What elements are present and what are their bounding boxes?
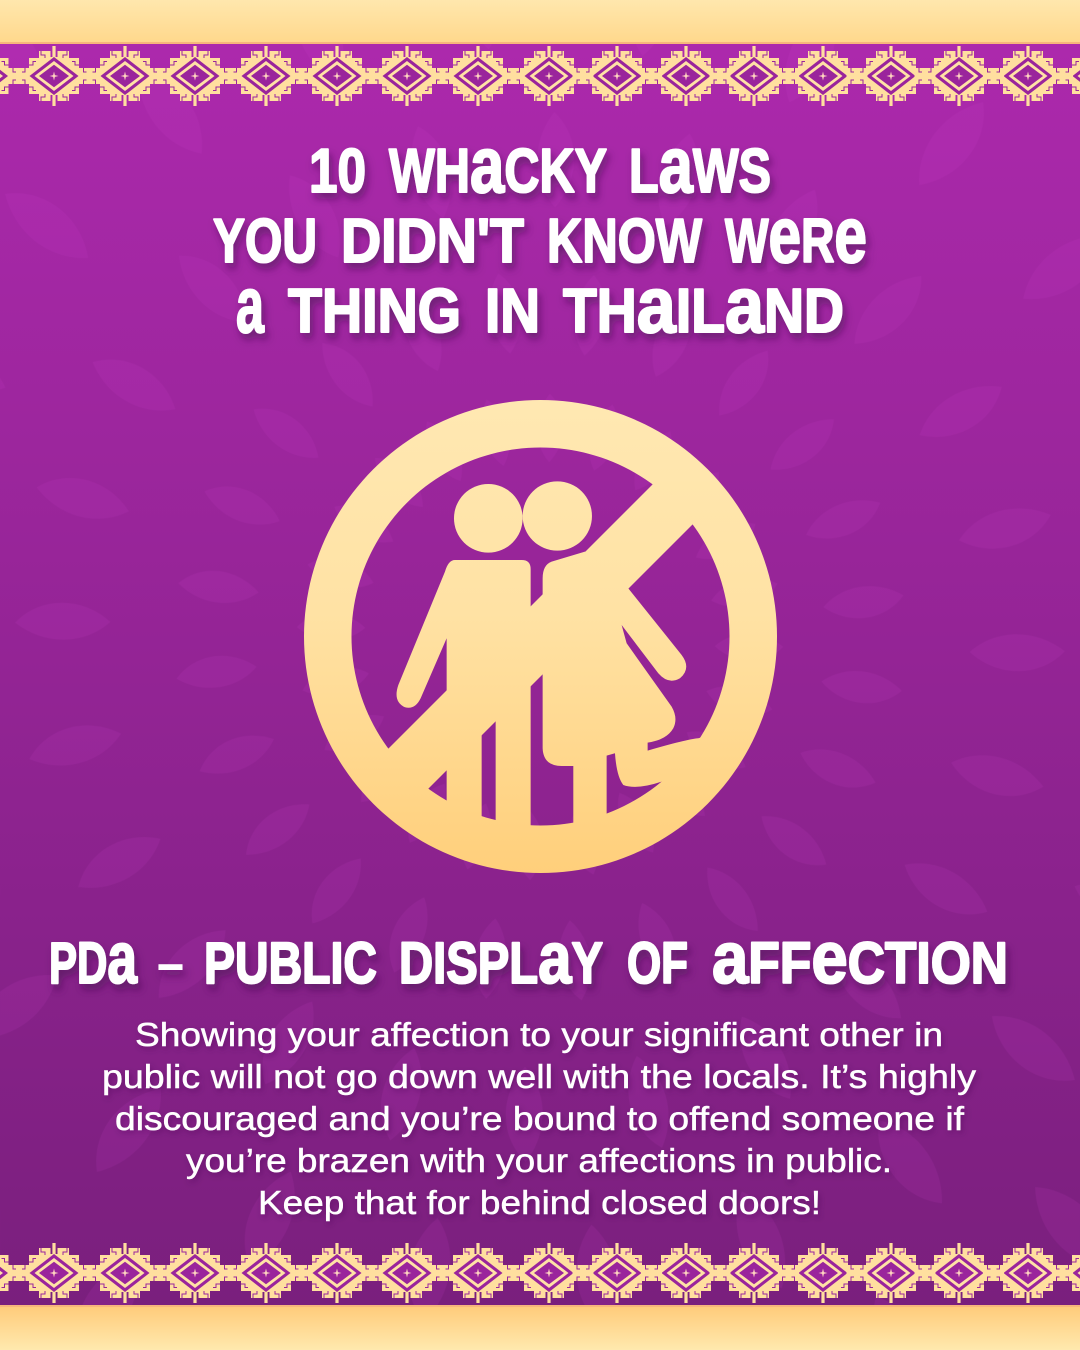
title: KNOW: [547, 207, 702, 276]
title: THaILaND: [563, 261, 844, 349]
title: [213, 121, 867, 349]
body text: Keep that for behind closed doors!: [258, 1184, 821, 1221]
title: 10: [309, 137, 366, 206]
title: IN: [485, 277, 540, 346]
title: DIDN'T: [341, 207, 524, 276]
couple figures: [397, 481, 710, 830]
prohibition ring: [304, 400, 777, 873]
heading: PDA: PDa: [49, 916, 138, 999]
bottom ornament border: [0, 1243, 1080, 1303]
heading: PDA: PUBLIC: [204, 931, 377, 996]
body text: [102, 1016, 977, 1221]
heading: PDA: aFFeCTION: [712, 916, 1008, 999]
prohibition slash: [372, 469, 708, 805]
top gold band: [0, 0, 1080, 43]
icon: no public display of affection sign: [304, 400, 777, 873]
body text: Showing your affection to your significant other in: [135, 1016, 943, 1053]
man head: [454, 484, 523, 553]
man body: [397, 560, 531, 830]
heading: PDA: DISPLaY: [399, 916, 603, 999]
bottom gold band: [0, 1306, 1080, 1350]
title: THING: [288, 277, 461, 346]
body text: discouraged and you’re bound to offend someone if: [115, 1100, 965, 1137]
heading: PDA: OF: [627, 931, 688, 996]
title: WeRe: [725, 191, 867, 279]
title: WHaCKY: [389, 121, 607, 209]
heading: PDA: –: [157, 931, 184, 996]
top ornament border: [0, 46, 1080, 106]
top band edge: [0, 42, 1080, 44]
woman body: [543, 552, 710, 830]
body text: public will not go down well with the locals. It’s highly: [102, 1058, 977, 1095]
bottom band edge: [0, 1305, 1080, 1307]
title: a: [236, 261, 265, 349]
body text: you’re brazen with your affections in public.: [186, 1142, 892, 1179]
heading: PDA: [49, 916, 1008, 999]
title: LaWS: [629, 121, 771, 209]
title: YOU: [213, 207, 317, 276]
woman head: [523, 481, 592, 551]
